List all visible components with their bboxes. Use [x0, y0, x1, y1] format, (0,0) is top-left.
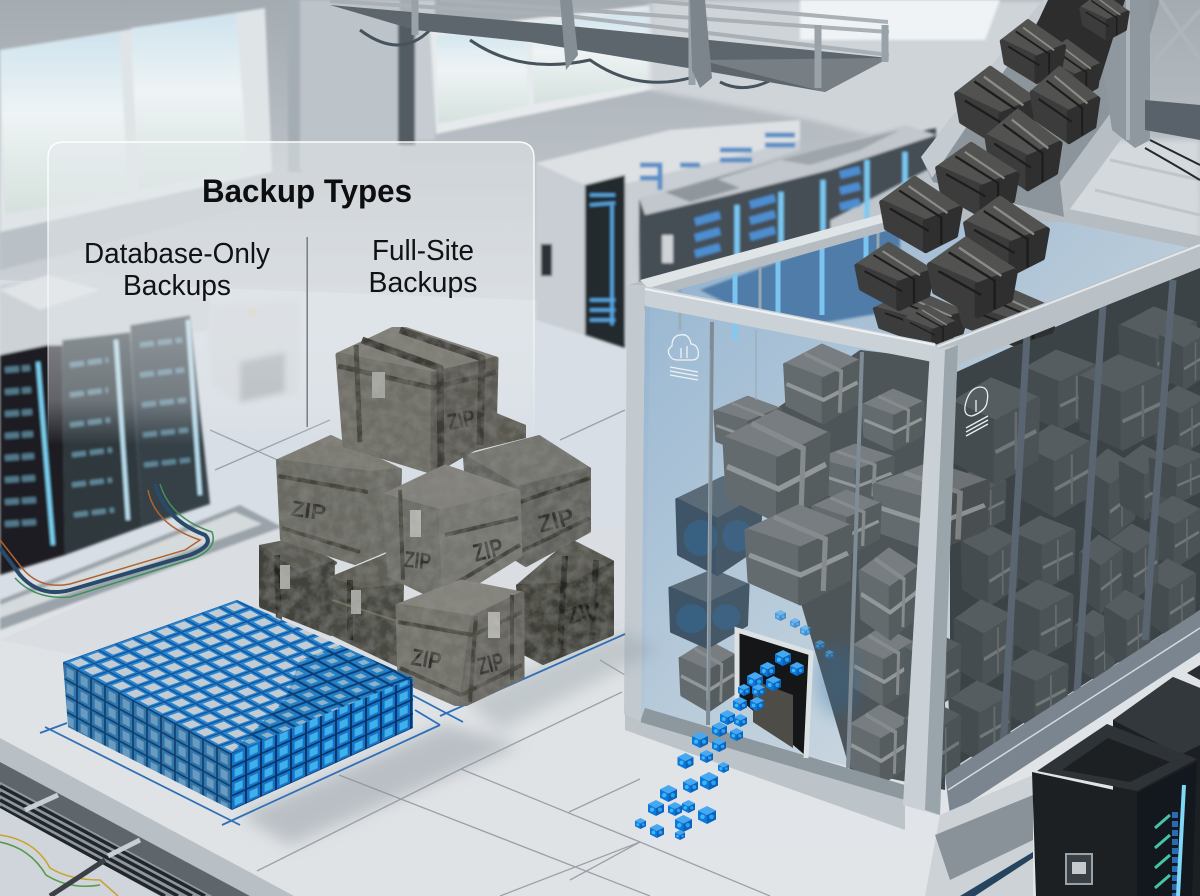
- glass container front frame: [624, 243, 1200, 830]
- overhead catwalk: [330, 0, 889, 92]
- left-face mullions: [708, 322, 862, 768]
- back server racks: [536, 120, 936, 348]
- opening: [737, 630, 811, 756]
- right-face mullions: [1003, 280, 1173, 750]
- metal chute: [921, 0, 1200, 217]
- right wall and window: [650, 0, 1060, 150]
- centre pipes and pillar: [288, 0, 435, 172]
- blue cube grid: database-only backups: [63, 600, 413, 810]
- cascade of dark crates from chute: [857, 0, 1128, 346]
- mid-centre crate: ZIP: [403, 546, 432, 575]
- front crate: [398, 582, 522, 706]
- mid-right crate: [465, 437, 590, 565]
- shadows on floor: [240, 630, 660, 845]
- blue glow behind glass: [775, 610, 860, 716]
- corner post front: [903, 345, 958, 815]
- small rear crate: [470, 412, 526, 452]
- front crate: ZIP: [475, 648, 507, 681]
- back wall: [0, 0, 1200, 300]
- bottom-middle crate: [330, 555, 402, 666]
- column: database-only backups: Database-Only: [84, 238, 271, 270]
- bottom rail left: [625, 706, 905, 830]
- column: full-site backups: Backups: [368, 267, 478, 299]
- top rail left: [640, 285, 948, 365]
- right side crate stacks: [950, 265, 1200, 770]
- left window: [0, 8, 275, 270]
- column: database-only backups: [84, 238, 271, 302]
- foreground server rack: [925, 665, 1200, 896]
- top rail right: [935, 243, 1200, 368]
- mid-centre crate: [384, 467, 520, 602]
- column: full-site backups: Full-Site: [372, 235, 474, 267]
- corner post left: [624, 285, 645, 722]
- cloud icon front: [668, 335, 698, 380]
- floor base: [0, 280, 640, 896]
- cloud icon side: [965, 387, 988, 436]
- bottom rail right: [945, 610, 1200, 815]
- glass container back frame and interior: [628, 205, 1200, 790]
- top crate: [338, 327, 496, 472]
- racks through glass: [700, 225, 900, 330]
- divider: [306, 237, 308, 427]
- bottom-right crate: [518, 541, 614, 663]
- left server racks: [0, 272, 300, 630]
- top crate: ZIP: [445, 404, 477, 435]
- mid-centre crate: ZIP: [470, 533, 506, 568]
- bottom-right crate: ZIP: [562, 594, 604, 630]
- mid-right crate: ZIP: [535, 504, 577, 538]
- guide lines on floor: [40, 634, 625, 825]
- centre window: [430, 5, 660, 134]
- panel: backup types: [48, 142, 534, 445]
- floor trench with cables: [0, 738, 294, 896]
- mid-left crate: [278, 437, 400, 563]
- bottom-left crate: [259, 540, 335, 634]
- falling blue cubes: [635, 650, 804, 840]
- front face crates inside container: [670, 346, 987, 790]
- ZIP crate stack: [259, 327, 614, 706]
- mid-left crate: ZIP: [289, 496, 327, 525]
- column: database-only backups: Backups: [123, 270, 231, 302]
- heading: Backup Types: [202, 173, 412, 209]
- front crate: ZIP: [409, 644, 443, 676]
- rear appliance: [208, 300, 300, 405]
- back rail: [628, 205, 1200, 300]
- floor tile lines: [210, 410, 770, 896]
- column: full-site backups: [368, 235, 478, 299]
